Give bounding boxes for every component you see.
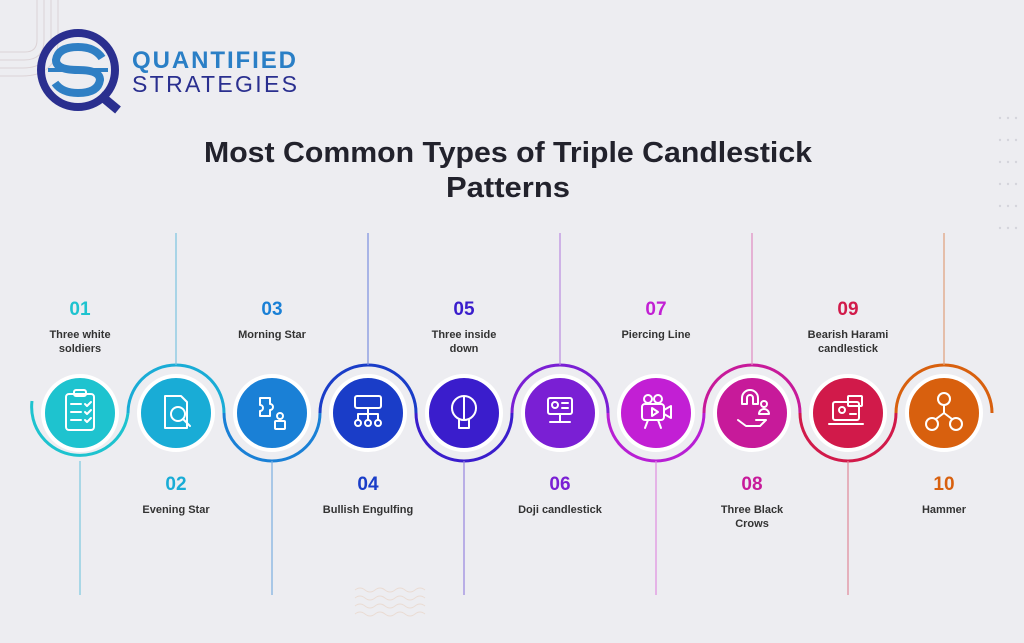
labels: candlestick bbox=[818, 343, 879, 355]
title: Patterns bbox=[446, 172, 570, 204]
labels: Bullish Engulfing bbox=[323, 504, 413, 516]
labels: Bearish Harami bbox=[808, 329, 888, 341]
labels: 02 bbox=[165, 474, 187, 495]
labels: Doji candlestick bbox=[518, 504, 603, 516]
title: Most Common Types of Triple Candlestick bbox=[204, 137, 813, 169]
labels: 09 bbox=[837, 299, 859, 320]
labels: 04 bbox=[357, 474, 379, 495]
labels: soldiers bbox=[59, 343, 101, 355]
labels: Three Black bbox=[721, 504, 784, 516]
logo bbox=[41, 33, 298, 110]
labels: Piercing Line bbox=[621, 329, 691, 341]
labels: Crows bbox=[735, 518, 769, 530]
labels: Evening Star bbox=[142, 504, 210, 516]
labels: 05 bbox=[453, 299, 475, 320]
labels: Three white bbox=[49, 329, 111, 341]
labels: 07 bbox=[645, 299, 667, 320]
labels: 01 bbox=[69, 299, 91, 320]
icons bbox=[66, 390, 962, 430]
labels: 10 bbox=[933, 474, 955, 495]
title bbox=[204, 137, 813, 204]
labels: down bbox=[450, 343, 479, 355]
labels: 06 bbox=[549, 474, 571, 495]
logo: STRATEGIES bbox=[132, 71, 298, 97]
labels: 03 bbox=[261, 299, 283, 320]
labels: Hammer bbox=[922, 504, 967, 516]
labels: 08 bbox=[741, 474, 763, 495]
logo: QUANTIFIED bbox=[132, 47, 298, 74]
labels: Three inside bbox=[432, 329, 496, 341]
timeline wave bbox=[32, 365, 992, 461]
circles bbox=[43, 376, 981, 450]
labels: Morning Star bbox=[238, 329, 307, 341]
labels bbox=[49, 299, 967, 530]
